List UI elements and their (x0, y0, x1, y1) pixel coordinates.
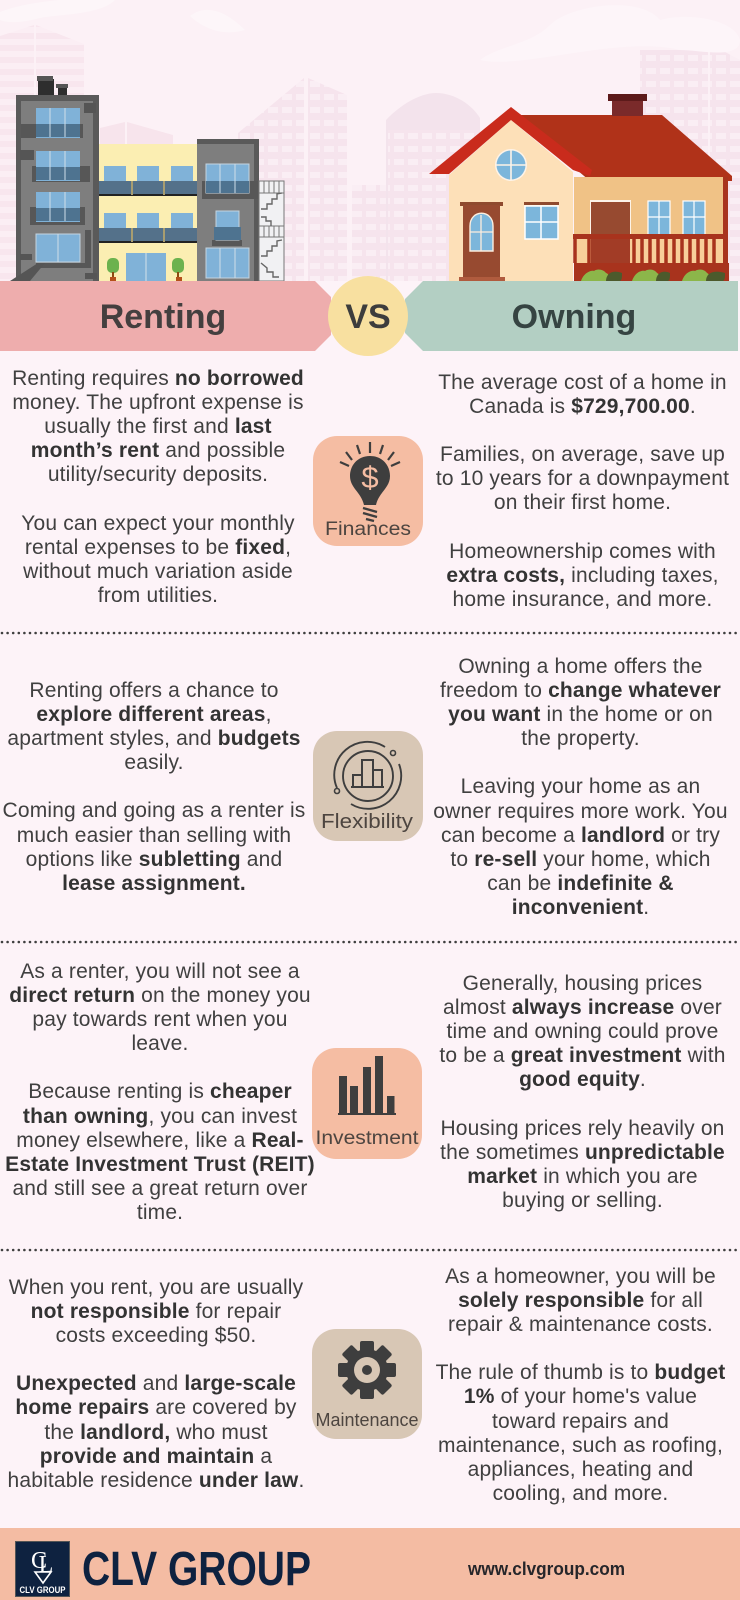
house (429, 94, 732, 281)
vs badge: VS (345, 298, 391, 336)
text: owning maintenance: cooling, and more. (493, 1482, 668, 1505)
banner: renting (0, 281, 331, 351)
icon: flexibility: Flexibility (321, 811, 413, 833)
text: renting finances: money. The upfront expense is (12, 391, 304, 414)
illustration header (0, 25, 740, 356)
text: owning maintenance: As a homeowner, you will be (445, 1265, 716, 1288)
text: owning flexibility (433, 655, 728, 919)
text: owning investment: time and owning could prove (447, 1020, 718, 1043)
icon: maintenance (312, 1329, 422, 1439)
text: renting maintenance: habitable residence under law. (8, 1469, 304, 1492)
background skyline (0, 0, 740, 281)
text: renting finances: without much variation aside (23, 560, 293, 583)
text: owning investment: the sometimes unpredictable (440, 1141, 725, 1164)
clouds (480, 5, 740, 62)
text: renting finances (12, 367, 304, 607)
text: renting flexibility: easily. (124, 751, 184, 774)
text: renting finances: Renting requires no borrowed (12, 367, 304, 390)
text: renting finances: month’s rent and possible (31, 439, 285, 462)
text: owning flexibility: can become a landlord or try (441, 824, 720, 847)
text: renting maintenance: When you rent, you are usually (9, 1276, 303, 1299)
divider (0, 940, 737, 944)
text: renting flexibility: options like subletting and (26, 848, 282, 871)
text: owning investment (439, 972, 726, 1212)
text: owning investment: good equity. (519, 1068, 646, 1091)
logo mark: L (39, 1552, 53, 1578)
icon: finances: Finances (325, 519, 411, 540)
text: owning finances: to 10 years for a downpayment (436, 467, 729, 490)
text: renting flexibility: explore different areas, (36, 703, 272, 726)
text: renting investment: leave. (131, 1032, 189, 1055)
text: owning finances: extra costs, including taxes, (446, 564, 719, 587)
text: renting maintenance: Unexpected and large-scale (16, 1372, 296, 1395)
text: renting flexibility: apartment styles, and budgets (7, 727, 301, 750)
text: owning maintenance (436, 1265, 725, 1505)
text: renting investment: pay towards rent when you (32, 1008, 288, 1031)
icon: finances: $ (361, 460, 379, 495)
text: owning investment: buying or selling. (502, 1189, 663, 1212)
website: www.clvgroup.com (467, 1559, 625, 1579)
sky (0, 0, 740, 281)
text: owning finances: Homeownership comes with (449, 540, 716, 563)
text: owning finances: Families, on average, save up (440, 443, 725, 466)
text: owning maintenance: toward repairs and (492, 1410, 669, 1433)
text: owning finances: The average cost of a home in (438, 371, 727, 394)
text: owning flexibility: Owning a home offers the (458, 655, 703, 678)
text: renting maintenance: the landlord, who must (44, 1421, 268, 1444)
logo mark: C (31, 1548, 47, 1574)
text: owning flexibility: inconvenient. (512, 896, 649, 919)
fire escape (259, 181, 284, 281)
text: owning maintenance: maintenance, such as roofing, (438, 1434, 723, 1457)
text: owning flexibility: can be indefinite & (487, 872, 674, 895)
text: renting finances: utility/security deposits. (48, 463, 268, 486)
text: owning flexibility: to re-sell your home, which (450, 848, 711, 871)
text: owning investment: market in which you are (467, 1165, 698, 1188)
text: renting investment: and still see a great return over (12, 1177, 308, 1200)
footer (0, 1528, 740, 1600)
banner: renting: Renting (100, 298, 226, 336)
text: owning maintenance: The rule of thumb is to budget (436, 1361, 725, 1384)
text: renting maintenance: home repairs are covered by (15, 1396, 297, 1419)
text: owning investment: almost always increase over (443, 996, 722, 1019)
text: owning flexibility: owner requires more work. You (433, 800, 728, 823)
text: owning maintenance: solely responsible for all (458, 1289, 703, 1312)
text: renting maintenance: provide and maintain a (40, 1445, 272, 1468)
text: owning finances (436, 371, 729, 611)
text: renting flexibility: Coming and going as a renter is (3, 799, 305, 822)
logo mark (15, 1541, 70, 1597)
text: owning investment: Housing prices rely heavily on (440, 1117, 725, 1140)
text: renting finances: You can expect your monthly (21, 512, 295, 535)
text: renting flexibility: Renting offers a chance to (29, 679, 279, 702)
text: renting flexibility (3, 679, 305, 895)
text: owning investment: Generally, housing prices (463, 972, 702, 995)
text: owning flexibility: Leaving your home as an (461, 775, 700, 798)
text: renting flexibility: much easier than selling with (17, 824, 291, 847)
text: renting maintenance: costs exceeding $50. (56, 1324, 256, 1347)
icon: flexibility (313, 731, 423, 841)
icon: finances (313, 436, 423, 546)
text: owning maintenance: appliances, heating and (468, 1458, 693, 1481)
text: owning flexibility: the property. (521, 727, 640, 750)
text: owning maintenance: repair & maintenance costs. (448, 1313, 713, 1336)
logo mark: CLV GROUP (20, 1585, 66, 1595)
text: renting investment: money elsewhere, like a Real- (16, 1129, 304, 1152)
banner: owning: Owning (512, 298, 636, 336)
text: owning flexibility: you want in the home or on (448, 703, 713, 726)
text: renting investment: than owning, you can invest (23, 1105, 297, 1128)
text: renting investment: As a renter, you will not see a (20, 960, 300, 983)
text: renting investment (5, 960, 315, 1224)
text: renting investment: time. (137, 1201, 183, 1224)
vs badge (328, 276, 408, 356)
text: renting flexibility: lease assignment. (62, 872, 246, 895)
icon: maintenance: Maintenance (316, 1410, 418, 1430)
text: owning maintenance: 1% of your home's value (464, 1385, 697, 1408)
icon: investment (312, 1048, 422, 1159)
text: renting investment: direct return on the money you (9, 984, 311, 1007)
text: renting finances: rental expenses to be fixed, (25, 536, 291, 559)
text: renting investment: Because renting is cheaper (28, 1080, 292, 1103)
text: renting maintenance: not responsible for repair (31, 1300, 281, 1323)
apartment building (10, 76, 284, 281)
text: renting investment: Estate Investment Trust (REIT) (5, 1153, 315, 1176)
text: renting finances: usually the first and last (44, 415, 272, 438)
text: owning finances: on their first home. (494, 491, 671, 514)
text: owning finances: home insurance, and more. (453, 588, 712, 611)
text: owning flexibility: freedom to change whatever (440, 679, 721, 702)
banner: owning (405, 281, 738, 351)
text: owning investment: to be a great investment with (439, 1044, 726, 1067)
divider (0, 1248, 737, 1252)
divider (0, 632, 737, 634)
text: renting finances: from utilities. (98, 584, 218, 607)
icon: investment: Investment (316, 1128, 419, 1149)
text: owning finances: Canada is $729,700.00. (469, 395, 696, 418)
text: renting maintenance (8, 1276, 304, 1492)
